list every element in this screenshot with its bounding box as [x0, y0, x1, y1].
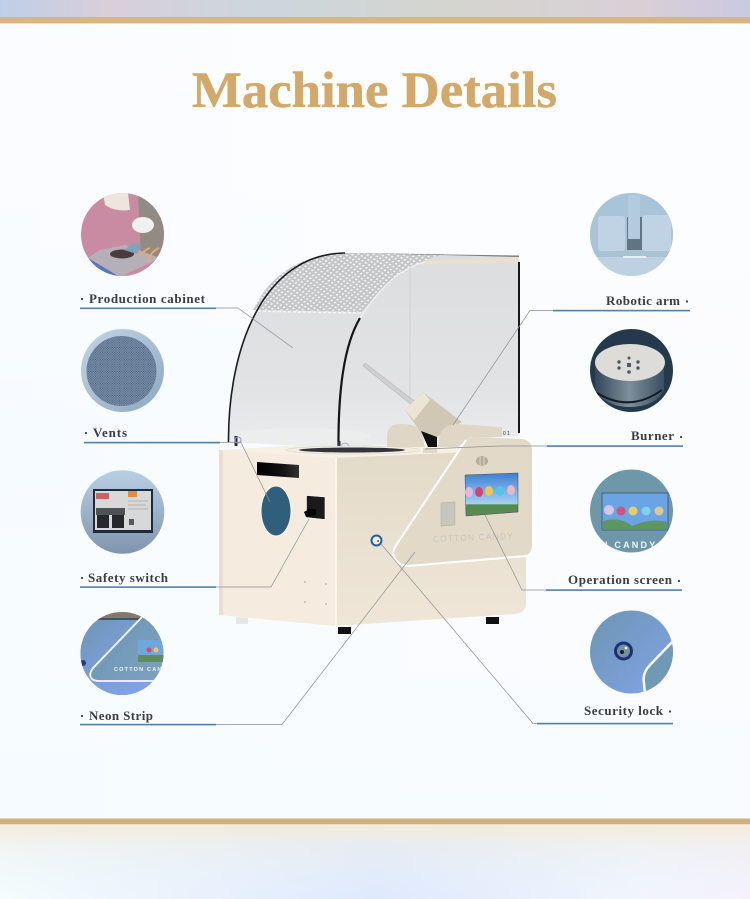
bullet — [81, 715, 83, 717]
label: Neon Strip — [89, 708, 153, 723]
underline — [537, 723, 673, 724]
thumbnail: operation screen: N CANDY — [601, 540, 657, 550]
thumbnail: production cabinet — [81, 192, 165, 277]
label: Safety switch — [88, 570, 169, 585]
top decorative band — [0, 0, 750, 24]
callout: security lock — [537, 610, 674, 724]
bullet — [81, 577, 83, 579]
underline — [80, 724, 216, 725]
glass canopy: 0 1 — [503, 431, 510, 437]
feet — [236, 617, 499, 634]
label: Vents — [93, 425, 127, 440]
callout: neon strip — [80, 612, 216, 725]
leader lines — [216, 308, 553, 724]
black slit — [257, 462, 299, 478]
cabinet body — [219, 446, 526, 626]
bullet — [686, 300, 688, 303]
callout: operation screen — [546, 469, 682, 591]
underline — [547, 445, 683, 447]
glass canopy — [228, 253, 519, 452]
thumbnail: burner — [589, 329, 674, 413]
callout: vents — [81, 329, 220, 443]
thumbnail: robotic arm — [589, 193, 674, 277]
blue vent oval — [261, 486, 291, 536]
label: Operation screen — [568, 572, 673, 587]
robotic arm — [363, 363, 502, 447]
label: Security lock — [584, 703, 664, 718]
callout: production cabinet — [80, 192, 216, 309]
underline — [84, 442, 220, 443]
bottom decorative band — [0, 818, 750, 899]
underline — [546, 589, 682, 591]
bullet — [678, 580, 680, 582]
card reader window — [441, 502, 455, 526]
bullet — [81, 298, 83, 300]
callout: burner — [547, 329, 683, 447]
bullet — [669, 710, 671, 713]
safety switch box — [304, 496, 325, 520]
control panel with neon strip — [393, 437, 532, 566]
thumbnail: safety switch — [81, 470, 164, 554]
underline — [553, 310, 690, 311]
touch screen — [465, 473, 518, 516]
thumbnail: security lock — [589, 610, 674, 695]
machine illustration — [219, 253, 532, 634]
underline — [80, 308, 216, 309]
label: Robotic arm — [606, 293, 680, 308]
bullet — [680, 436, 682, 438]
security lock — [370, 534, 383, 547]
callout: safety switch — [80, 470, 216, 588]
underline — [80, 586, 216, 588]
label: Burner — [631, 428, 674, 443]
panel wordmark: COTTON CANDY — [433, 531, 513, 544]
thumbnail: neon strip: COTTON CANDY — [114, 667, 173, 673]
callout: robotic arm — [553, 193, 690, 311]
label: Production cabinet — [89, 291, 206, 306]
title: Machine Details — [192, 63, 557, 119]
thumbnail: vents — [81, 329, 164, 412]
bullet — [85, 432, 87, 434]
